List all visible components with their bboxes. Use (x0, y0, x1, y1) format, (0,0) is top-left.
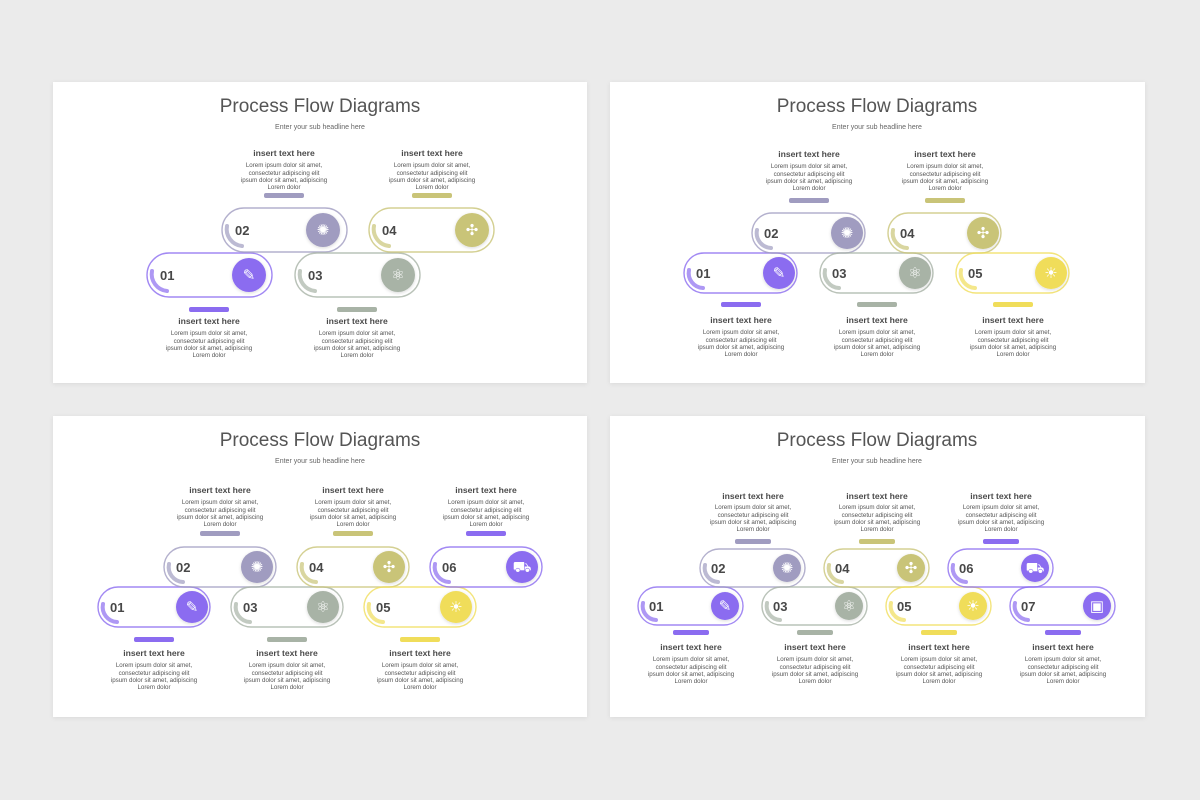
step 01: ✎ (243, 267, 255, 284)
title: Process Flow Diagrams (777, 96, 977, 117)
text: step 03: Lorem dolor (270, 684, 304, 691)
text: step 02: Lorem ipsum dolor sit amet, (246, 162, 322, 169)
text: step 01 (698, 302, 785, 358)
text: step 01: Lorem ipsum dolor sit amet, (116, 662, 192, 669)
text: step 04: Lorem ipsum dolor sit amet, (315, 499, 391, 506)
text: step 01: insert text here (710, 315, 772, 325)
text: step 04: consectetur adipiscing elit (910, 171, 981, 178)
text: step 01: consectetur adipiscing elit (706, 337, 777, 344)
text: step 04 (834, 491, 921, 544)
subtitle: Enter your sub headline here (275, 124, 365, 131)
text: step 04: consectetur adipiscing elit (318, 507, 389, 514)
subtitle: Enter your sub headline here (832, 458, 922, 465)
text: step 06 (443, 485, 530, 536)
text: step 02: insert text here (778, 149, 840, 159)
step 07 (1010, 587, 1115, 625)
step 01 (147, 253, 272, 297)
text: step 05: Lorem ipsum dolor sit amet, (975, 329, 1051, 336)
step 02 (752, 213, 865, 253)
text: step 01 (648, 630, 735, 685)
text: step 05: Lorem dolor (996, 351, 1030, 358)
text: step 01: insert text here (123, 648, 185, 658)
text: step 01: insert text here (178, 316, 240, 326)
text: step 01 (166, 307, 253, 359)
step 05: ☀ (966, 598, 980, 615)
text: step 02: Lorem dolor (736, 526, 770, 533)
text: step 01 (111, 637, 198, 691)
text: step 02: ipsum dolor sit amet, adipiscing (710, 519, 797, 526)
step 05 (886, 587, 991, 625)
step 02: 02 (711, 561, 725, 576)
step 03: 03 (773, 599, 787, 614)
step 06: ⛟ (1026, 560, 1045, 577)
step 01 (98, 587, 210, 627)
text: step 04: Lorem ipsum dolor sit amet, (394, 162, 470, 169)
step 03: 03 (832, 266, 846, 281)
text: step 01: Lorem dolor (724, 351, 758, 358)
text: step 04: Lorem dolor (415, 184, 449, 191)
text: step 04: ipsum dolor sit amet, adipiscing (834, 519, 921, 526)
step 02 (222, 208, 347, 252)
text: step 04: Lorem ipsum dolor sit amet, (907, 163, 983, 170)
step 04: 04 (382, 223, 397, 238)
text: step 05: ipsum dolor sit amet, adipiscing (970, 344, 1057, 351)
text: step 02: Lorem ipsum dolor sit amet, (771, 163, 847, 170)
text: step 03: Lorem dolor (340, 352, 374, 359)
text: step 03: ipsum dolor sit amet, adipiscing (314, 345, 401, 352)
text: step 01: insert text here (660, 642, 722, 652)
text: step 01: Lorem dolor (137, 684, 171, 691)
text: step 03: ipsum dolor sit amet, adipiscing (772, 671, 859, 678)
text: step 06 (958, 491, 1045, 544)
text: step 01: Lorem ipsum dolor sit amet, (653, 656, 729, 663)
step 04: ✣ (905, 560, 917, 577)
text: step 03 (834, 302, 921, 358)
text: step 02: Lorem dolor (203, 521, 237, 528)
step 02: 02 (235, 223, 249, 238)
text: step 04 (902, 149, 989, 203)
step 02: ✺ (781, 560, 793, 577)
text: step 04 (389, 148, 476, 198)
text: step 05 (896, 630, 983, 685)
step 05: 05 (897, 599, 911, 614)
text: step 07: Lorem ipsum dolor sit amet, (1025, 656, 1101, 663)
step 02: ✺ (251, 559, 263, 576)
step 02: ✺ (317, 222, 329, 239)
step 03: ⚛ (391, 267, 405, 284)
step 05: 05 (376, 600, 390, 615)
subtitle: Enter your sub headline here (832, 124, 922, 131)
title: Process Flow Diagrams (777, 430, 977, 451)
panel: slide 2 (5 steps) (610, 82, 1145, 383)
text: step 04: insert text here (401, 148, 463, 158)
text: step 06: ipsum dolor sit amet, adipiscing (958, 519, 1045, 526)
text: step 02 (766, 149, 853, 203)
text: step 01: Lorem ipsum dolor sit amet, (703, 329, 779, 336)
text: step 05: insert text here (389, 648, 451, 658)
text: step 03 (314, 307, 401, 359)
text: step 03: Lorem dolor (860, 351, 894, 358)
text: step 03: ipsum dolor sit amet, adipiscing (834, 344, 921, 351)
text: step 02: Lorem dolor (792, 185, 826, 192)
text: step 02: ipsum dolor sit amet, adipiscing (241, 177, 328, 184)
text: step 03: insert text here (846, 315, 908, 325)
text: step 01: Lorem dolor (674, 678, 708, 685)
text: step 02: consectetur adipiscing elit (718, 512, 789, 519)
text: step 05 (970, 302, 1057, 358)
text: step 01: ipsum dolor sit amet, adipiscing (648, 671, 735, 678)
panel: slide 3 (6 steps) (53, 416, 587, 717)
text: step 06: Lorem dolor (984, 526, 1018, 533)
text: step 05 (377, 637, 464, 691)
step 06: 06 (442, 560, 456, 575)
text: step 04: Lorem dolor (928, 185, 962, 192)
text: step 02: insert text here (722, 491, 784, 501)
text: step 02: insert text here (189, 485, 251, 495)
text: step 03 (772, 630, 859, 685)
text: step 01: Lorem dolor (192, 352, 226, 359)
text: step 07: insert text here (1032, 642, 1094, 652)
step 01: 01 (696, 266, 710, 281)
step 03: ⚛ (316, 599, 330, 616)
text: step 03: consectetur adipiscing elit (322, 338, 393, 345)
step 03: 03 (243, 600, 257, 615)
step 06 (430, 547, 542, 587)
step 05: ☀ (449, 599, 463, 616)
step 01: 01 (649, 599, 663, 614)
text: step 07: Lorem dolor (1046, 678, 1080, 685)
text: step 01: ipsum dolor sit amet, adipiscing (111, 677, 198, 684)
step 01: ✎ (773, 265, 785, 282)
text: step 06: Lorem ipsum dolor sit amet, (448, 499, 524, 506)
text: step 02 (241, 148, 328, 198)
text: step 07 (1020, 630, 1107, 685)
text: step 04: Lorem ipsum dolor sit amet, (839, 504, 915, 511)
text: step 04: ipsum dolor sit amet, adipiscing (310, 514, 397, 521)
step 07: 07 (1021, 599, 1035, 614)
text: step 03: insert text here (256, 648, 318, 658)
text: step 03: Lorem ipsum dolor sit amet, (249, 662, 325, 669)
text: step 02 (177, 485, 264, 536)
step 03: 03 (308, 268, 322, 283)
text: step 06: consectetur adipiscing elit (966, 512, 1037, 519)
text: step 03: consectetur adipiscing elit (842, 337, 913, 344)
step 06: ⛟ (513, 559, 532, 576)
text: step 05: insert text here (982, 315, 1044, 325)
text: step 06: Lorem ipsum dolor sit amet, (963, 504, 1039, 511)
panel: slide 1 (4 steps) (53, 82, 587, 383)
step 04 (297, 547, 409, 587)
text: step 02 (710, 491, 797, 544)
text: step 03: Lorem ipsum dolor sit amet, (777, 656, 853, 663)
text: step 05: insert text here (908, 642, 970, 652)
step 01: ✎ (719, 598, 731, 615)
text: step 03: insert text here (326, 316, 388, 326)
step 01: 01 (160, 268, 174, 283)
step 03 (295, 253, 420, 297)
step 01 (684, 253, 797, 293)
step 04: 04 (309, 560, 324, 575)
step 04 (824, 549, 929, 587)
text: step 04: Lorem dolor (336, 521, 370, 528)
text: step 03: Lorem dolor (798, 678, 832, 685)
text: step 01: consectetur adipiscing elit (119, 670, 190, 677)
text: step 06: insert text here (970, 491, 1032, 501)
text: step 05: consectetur adipiscing elit (904, 664, 975, 671)
step 04: ✣ (977, 225, 989, 242)
text: step 01: Lorem ipsum dolor sit amet, (171, 330, 247, 337)
text: step 02: consectetur adipiscing elit (774, 171, 845, 178)
step 04 (888, 213, 1001, 253)
text: step 07: consectetur adipiscing elit (1028, 664, 1099, 671)
text: step 05: ipsum dolor sit amet, adipiscing (896, 671, 983, 678)
step 05 (956, 253, 1069, 293)
text: step 05: consectetur adipiscing elit (385, 670, 456, 677)
text: step 02: insert text here (253, 148, 315, 158)
text: step 02: consectetur adipiscing elit (249, 170, 320, 177)
step 05: ☀ (1044, 265, 1058, 282)
step 06 (948, 549, 1053, 587)
text: step 01: consectetur adipiscing elit (174, 338, 245, 345)
step 05: 05 (968, 266, 982, 281)
step 02: 02 (176, 560, 190, 575)
step 03: ⚛ (842, 598, 856, 615)
text: step 05: ipsum dolor sit amet, adipiscing (377, 677, 464, 684)
step 03: ⚛ (908, 265, 922, 282)
step 03 (762, 587, 867, 625)
panel: slide 4 (7 steps) (610, 416, 1145, 717)
text: step 05: Lorem ipsum dolor sit amet, (901, 656, 977, 663)
step 04: 04 (835, 561, 850, 576)
step 06: 06 (959, 561, 973, 576)
step 05 (364, 587, 476, 627)
text: step 04: insert text here (846, 491, 908, 501)
step 02 (164, 547, 276, 587)
step 02: ✺ (841, 225, 853, 242)
step 04 (369, 208, 494, 252)
step 04: ✣ (466, 222, 478, 239)
text: step 02: consectetur adipiscing elit (185, 507, 256, 514)
text: step 04: Lorem dolor (860, 526, 894, 533)
step 03 (820, 253, 933, 293)
text: step 01: consectetur adipiscing elit (656, 664, 727, 671)
text: step 06: insert text here (455, 485, 517, 495)
step 07: ▣ (1090, 598, 1104, 615)
text: step 04: consectetur adipiscing elit (842, 512, 913, 519)
text: step 03: ipsum dolor sit amet, adipiscing (244, 677, 331, 684)
subtitle: Enter your sub headline here (275, 458, 365, 465)
step 04: ✣ (383, 559, 395, 576)
step 04: 04 (900, 226, 915, 241)
title: Process Flow Diagrams (220, 96, 420, 117)
text: step 03: insert text here (784, 642, 846, 652)
text: step 01: ipsum dolor sit amet, adipiscing (698, 344, 785, 351)
text: step 02: ipsum dolor sit amet, adipiscing (177, 514, 264, 521)
text: step 04: ipsum dolor sit amet, adipiscing (902, 178, 989, 185)
text: step 05: consectetur adipiscing elit (978, 337, 1049, 344)
text: step 04: insert text here (914, 149, 976, 159)
text: step 02: ipsum dolor sit amet, adipiscing (766, 178, 853, 185)
step 02 (700, 549, 805, 587)
text: step 05: Lorem dolor (403, 684, 437, 691)
text: step 03 (244, 637, 331, 691)
text: step 04: ipsum dolor sit amet, adipiscing (389, 177, 476, 184)
step 01 (638, 587, 743, 625)
text: step 02: Lorem ipsum dolor sit amet, (715, 504, 791, 511)
text: step 03: Lorem ipsum dolor sit amet, (319, 330, 395, 337)
text: step 04: consectetur adipiscing elit (397, 170, 468, 177)
title: Process Flow Diagrams (220, 430, 420, 451)
text: step 01: ipsum dolor sit amet, adipiscing (166, 345, 253, 352)
step 01: 01 (110, 600, 124, 615)
step 02: 02 (764, 226, 778, 241)
text: step 02: Lorem ipsum dolor sit amet, (182, 499, 258, 506)
text: step 05: Lorem dolor (922, 678, 956, 685)
text: step 07: ipsum dolor sit amet, adipiscing (1020, 671, 1107, 678)
text: step 03: consectetur adipiscing elit (780, 664, 851, 671)
step 03 (231, 587, 343, 627)
text: step 06: Lorem dolor (469, 521, 503, 528)
text: step 03: consectetur adipiscing elit (252, 670, 323, 677)
text: step 03: Lorem ipsum dolor sit amet, (839, 329, 915, 336)
text: step 05: Lorem ipsum dolor sit amet, (382, 662, 458, 669)
text: step 06: consectetur adipiscing elit (451, 507, 522, 514)
text: step 04: insert text here (322, 485, 384, 495)
text: step 02: Lorem dolor (267, 184, 301, 191)
text: step 06: ipsum dolor sit amet, adipiscing (443, 514, 530, 521)
step 01: ✎ (186, 599, 198, 616)
text: step 04 (310, 485, 397, 536)
